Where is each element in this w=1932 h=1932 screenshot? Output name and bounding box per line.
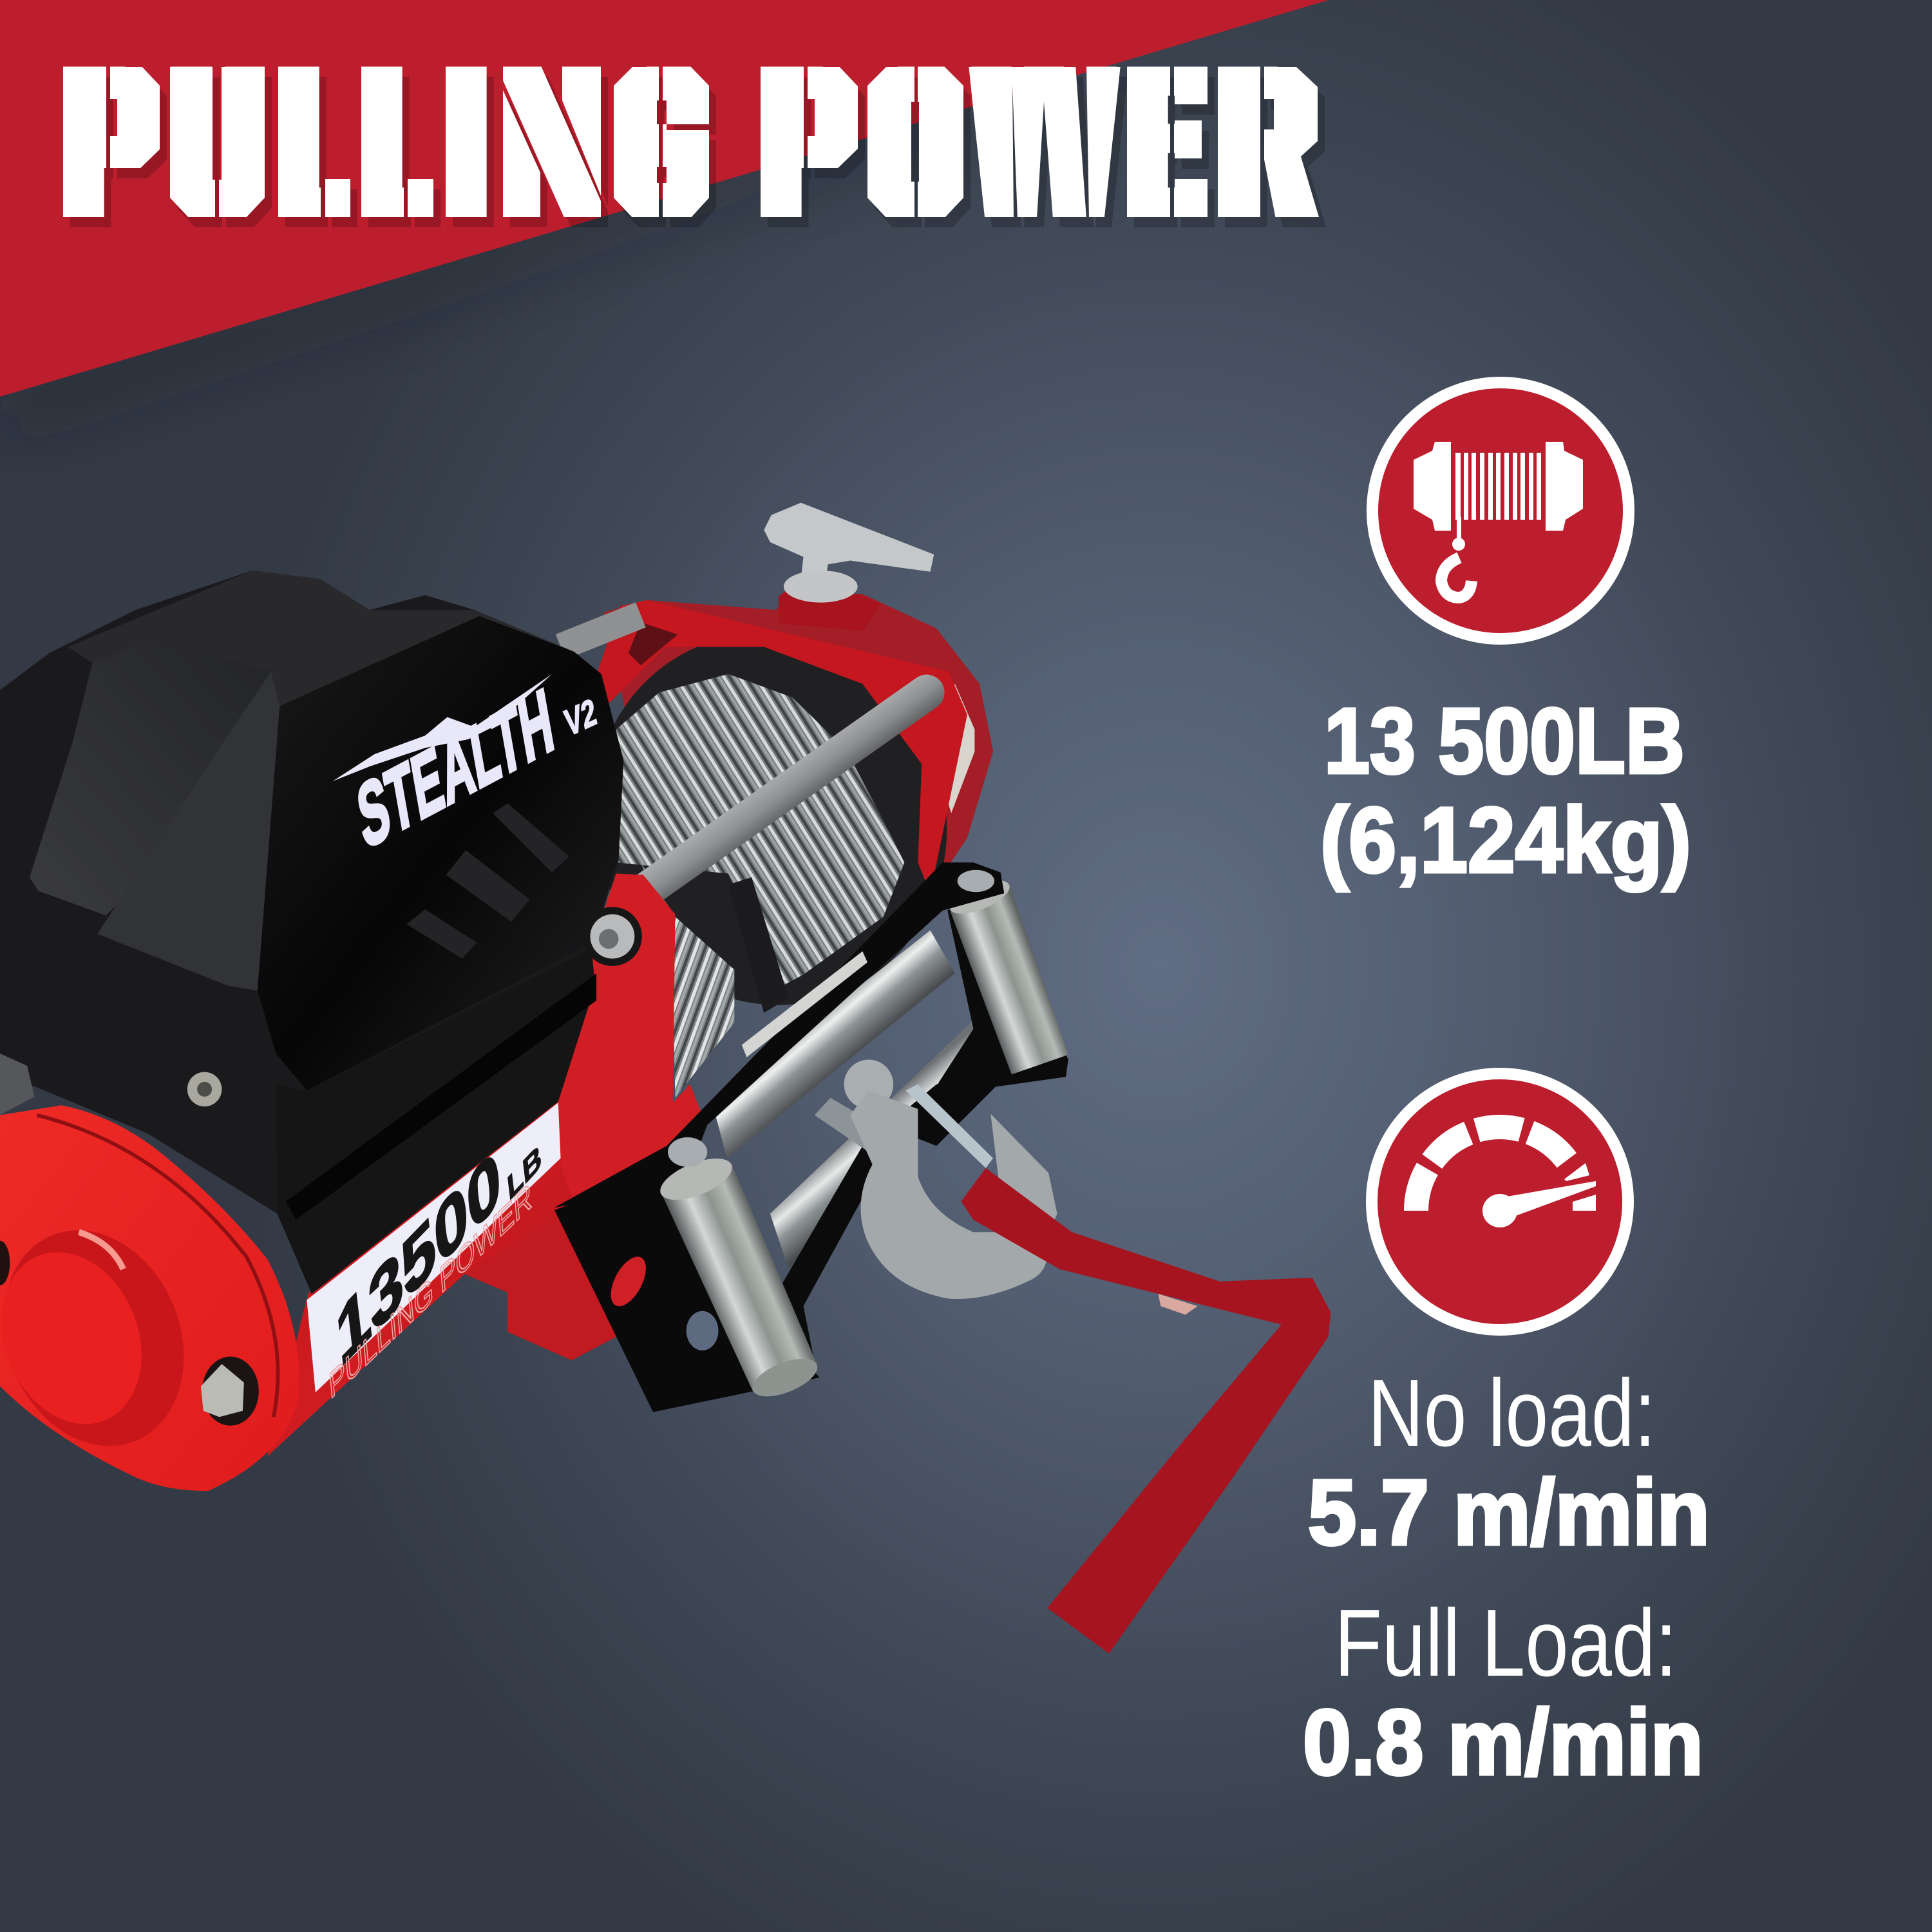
- left vertical roller: [655, 1150, 822, 1404]
- roller pin right: [958, 870, 994, 892]
- icon: winch badge: [1372, 383, 1629, 639]
- capacity lb: 13 500LB: [1324, 689, 1685, 793]
- capacity kg: (6,124kg): [1320, 788, 1691, 892]
- bracket holes: [603, 1251, 718, 1350]
- wire rope upper coil: [616, 674, 904, 986]
- winch icon: [1414, 442, 1583, 598]
- red foot: [464, 1214, 629, 1360]
- right vertical roller: [945, 874, 1068, 1074]
- cover mid panel: [97, 672, 279, 990]
- cover top panel: [68, 571, 574, 721]
- short rod: [561, 615, 641, 647]
- dark drum flange: [538, 580, 1003, 1059]
- grey motor sliver: [0, 1054, 35, 1115]
- motor cover body: [0, 571, 623, 1294]
- front horizontal roller: [712, 931, 955, 1159]
- long rod: [647, 692, 927, 889]
- motor cylinder: [267, 986, 641, 1457]
- warning label on housing: [943, 684, 974, 813]
- disc hub: [0, 1203, 215, 1473]
- end disc: [0, 1105, 299, 1491]
- title: PULLING POWER: [61, 26, 1310, 267]
- product: winch: [0, 503, 1331, 1654]
- rope strap: [728, 877, 789, 1013]
- frame cutout: [629, 622, 677, 665]
- full load label: Full Load:: [1334, 1590, 1677, 1696]
- cover lower band: [276, 949, 595, 1294]
- white capacity label: [307, 1103, 561, 1392]
- no load value: 5.7 m/min: [1308, 1461, 1710, 1564]
- hook: [815, 1059, 1057, 1299]
- cover black stripe: [286, 974, 596, 1220]
- fairlead right bracket: [905, 881, 1068, 1146]
- wire rope lower coil: [641, 862, 734, 1098]
- fairlead side wall: [554, 1171, 819, 1412]
- roller pin left: [668, 1137, 707, 1167]
- red diagonal banner: [0, 0, 1329, 397]
- rear horizontal roller: [770, 1020, 993, 1269]
- no load label: No load:: [1368, 1360, 1656, 1466]
- capacity number: 13500: [332, 1132, 505, 1384]
- fairlead bottom strip: [776, 1084, 996, 1374]
- title: [63, 67, 1326, 227]
- valve handle: [764, 503, 934, 631]
- cover screw: [187, 1072, 222, 1106]
- capacity unit: LB: [506, 1137, 544, 1208]
- v2 logo: V2: [562, 690, 600, 745]
- frame bolt: [583, 907, 642, 966]
- shadow under red banner: [0, 103, 966, 433]
- full load value: 0.8 m/min: [1303, 1690, 1703, 1794]
- strap tag: [1159, 1294, 1198, 1314]
- red rear frame: [598, 600, 967, 893]
- icon: speedometer badge: [1372, 1074, 1628, 1330]
- stealth logo: STEALTH: [351, 669, 560, 867]
- disc bolt: [201, 1357, 259, 1426]
- cover lid panel: [30, 641, 271, 916]
- cover front face: [258, 616, 623, 1090]
- gauge icon: [1416, 1127, 1596, 1227]
- wing logo: [333, 674, 552, 781]
- far drum housing: [604, 591, 993, 893]
- red strap: [961, 1168, 1331, 1654]
- left dark bolt: [0, 1241, 10, 1285]
- fairlead top plate: [554, 862, 1004, 1208]
- cover ridges: [406, 803, 569, 959]
- disc rim: [37, 1115, 278, 1417]
- front red plate: [542, 874, 703, 1220]
- pulling power decal: PULLING POWER: [327, 1175, 533, 1408]
